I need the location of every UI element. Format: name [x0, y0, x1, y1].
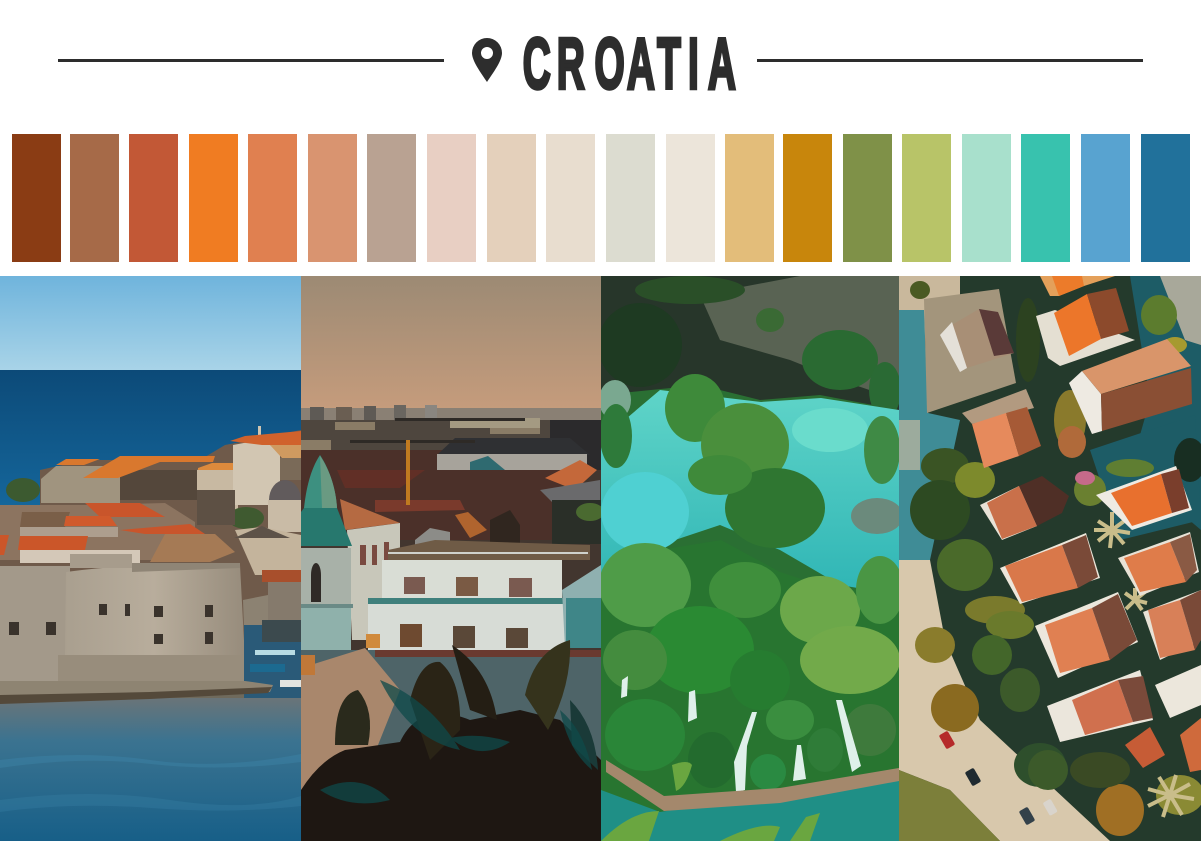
- waterfalls: [621, 676, 861, 792]
- house: mid left: [1000, 533, 1100, 604]
- icon: map pin: [472, 38, 502, 82]
- leaf highlights: [320, 680, 592, 803]
- water ripples: [0, 754, 301, 812]
- house: lower right: [1143, 590, 1201, 660]
- turquoise pool: [601, 775, 899, 841]
- photo: aerial view of houses: [899, 276, 1201, 841]
- house: large tan and brown roof: [1069, 339, 1192, 434]
- white building: [368, 560, 568, 654]
- lower greenery: [601, 543, 899, 789]
- photo: Plitvice lakes from above: [598, 276, 904, 841]
- turquoise river: [601, 390, 899, 595]
- house: brown roof with yard: [940, 309, 1014, 372]
- distant skyline: [301, 405, 601, 470]
- house: salmon roof with terrace: [962, 389, 1041, 468]
- title: [58, 25, 1143, 105]
- harbour quay: [0, 681, 273, 695]
- house: orange roof: [1036, 288, 1135, 366]
- right rule: [757, 59, 1143, 62]
- cars on road: [939, 731, 1058, 825]
- road and beach: [899, 276, 1201, 841]
- photo: Dubrovnik fortress and sea: [0, 276, 301, 841]
- lower roofs: [301, 634, 601, 790]
- side building: [340, 499, 400, 640]
- house: top orange: [1040, 276, 1115, 296]
- cliff: [598, 276, 901, 420]
- harbour water: [0, 698, 301, 841]
- foliage: [301, 640, 601, 841]
- greenery: [910, 281, 1201, 836]
- yard: [924, 289, 1016, 413]
- old town: [0, 426, 301, 640]
- left rule: [58, 59, 444, 62]
- fortress walls: [0, 554, 301, 688]
- palm trees: [1094, 512, 1194, 817]
- house: mid right: [1118, 532, 1199, 596]
- harbour boats: [244, 620, 301, 700]
- terrace rail: [388, 540, 590, 560]
- photo: rooftops at dusk with foliage: [301, 276, 604, 841]
- church tower: [301, 455, 353, 655]
- right teal roof: [562, 565, 601, 648]
- house: bottom: [1047, 670, 1153, 742]
- wooded island: [600, 374, 903, 548]
- house: bottom right: [1125, 665, 1201, 772]
- colour palette swatches: [12, 134, 1190, 262]
- house: dark brown roof: [980, 476, 1069, 540]
- house: lower left: [1035, 592, 1138, 678]
- house: orange roof right: [1096, 466, 1192, 530]
- foreground leaves: [601, 762, 820, 841]
- midground rooftops: [301, 418, 604, 545]
- boardwalk: [606, 760, 899, 811]
- heading text: CROATIA: [523, 25, 736, 105]
